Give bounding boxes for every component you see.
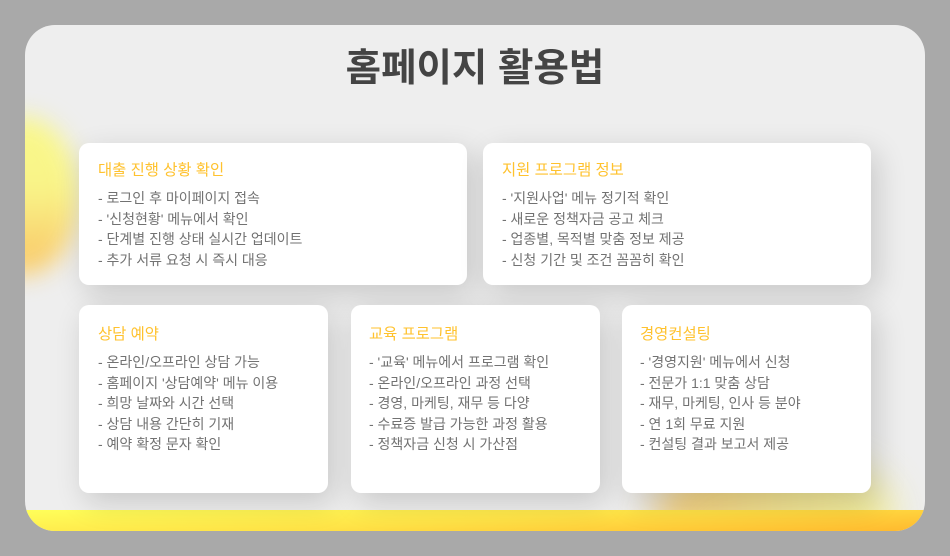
text block: management consulting	[640, 354, 801, 452]
text block: education programs: - 경영, 마케팅, 재무 등 다양	[369, 395, 530, 411]
heading: loan progress: 대출 진행 상황 확인	[98, 162, 224, 179]
panel: education programs	[351, 305, 600, 493]
text block: management consulting: - '경영지원' 메뉴에서 신청	[640, 354, 790, 370]
text block: support programs: - 신청 기간 및 조건 꼼꼼히 확인	[502, 252, 685, 268]
text block: management consulting: - 연 1회 무료 지원	[640, 416, 745, 432]
title: 홈페이지 활용법	[346, 47, 604, 90]
text block: management consulting: - 재무, 마케팅, 인사 등 분야	[640, 395, 801, 411]
text block: education programs: - 온라인/오프라인 과정 선택	[369, 375, 531, 391]
text block: education programs	[369, 354, 549, 452]
text block: loan progress: - 추가 서류 요청 시 즉시 대응	[98, 252, 268, 268]
decorative yellow glow left	[0, 117, 79, 275]
text block: consultation booking: - 예약 확정 문자 확인	[98, 436, 221, 452]
text block: education programs: - 정책자금 신청 시 가산점	[369, 436, 518, 452]
text block: support programs: - '지원사업' 메뉴 정기적 확인	[502, 190, 669, 206]
text block: loan progress: - 단계별 진행 상태 실시간 업데이트	[98, 231, 302, 247]
text block: loan progress: - '신청현황' 메뉴에서 확인	[98, 211, 248, 227]
heading: education programs: 교육 프로그램	[369, 326, 458, 343]
panel: consultation booking	[79, 305, 328, 493]
text block: management consulting: - 컨설팅 결과 보고서 제공	[640, 436, 789, 452]
text block: consultation booking	[98, 354, 278, 452]
heading: support programs: 지원 프로그램 정보	[502, 162, 624, 179]
decorative yellow glow bottom right	[655, 450, 895, 556]
text block: support programs: - 업종별, 목적별 맞춤 정보 제공	[502, 231, 685, 247]
text block: consultation booking: - 온라인/오프라인 상담 가능	[98, 354, 260, 370]
panel: support programs	[483, 143, 871, 285]
text block: education programs: - '교육' 메뉴에서 프로그램 확인	[369, 354, 549, 370]
panel: loan progress	[79, 143, 467, 285]
text block: consultation booking: - 상담 내용 간단히 기재	[98, 416, 234, 432]
text block: loan progress	[98, 190, 302, 268]
panel: management consulting	[622, 305, 871, 493]
text block: management consulting: - 전문가 1:1 맞춤 상담	[640, 375, 770, 391]
text block: support programs: - 새로운 정책자금 공고 체크	[502, 211, 664, 227]
heading: consultation booking: 상담 예약	[98, 326, 159, 343]
text block: consultation booking: - 홈페이지 '상담예약' 메뉴 이용	[98, 375, 278, 391]
text block: loan progress: - 로그인 후 마이페이지 접속	[98, 190, 260, 206]
heading: management consulting: 경영컨설팅	[640, 326, 711, 343]
text block: education programs: - 수료증 발급 가능한 과정 활용	[369, 416, 548, 432]
text block: consultation booking: - 희망 날짜와 시간 선택	[98, 395, 234, 411]
text block: support programs	[502, 190, 685, 268]
footer gradient bar	[25, 510, 925, 531]
